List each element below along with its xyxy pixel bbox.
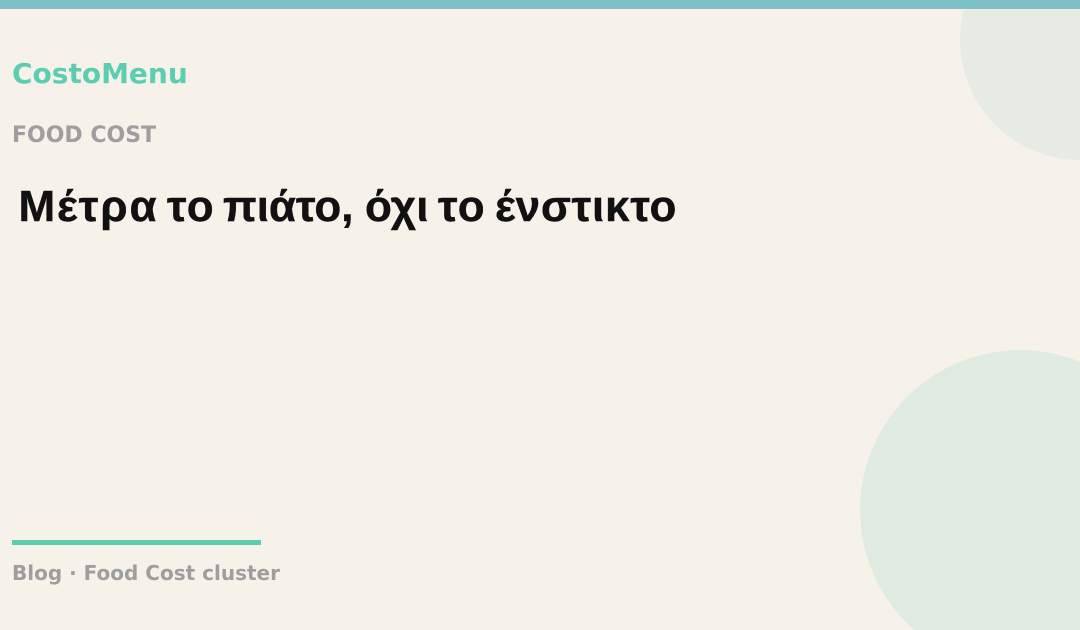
headline: πιάτο, [223,182,353,231]
headline: το [438,182,486,231]
headline: το [167,182,215,231]
footer label: Blog · Food Cost cluster [12,561,280,585]
decorative circle: top right [960,0,1080,160]
category label: FOOD COST [12,123,156,148]
headline: όχι [365,182,429,231]
headline: Μέτρα [18,182,158,231]
headline: ένστικτο [495,182,677,231]
brand name: CostoMenu [12,57,188,90]
decorative circle: bottom right [860,350,1080,630]
accent line [12,540,261,545]
headline [18,182,677,231]
top bar [0,0,1080,9]
